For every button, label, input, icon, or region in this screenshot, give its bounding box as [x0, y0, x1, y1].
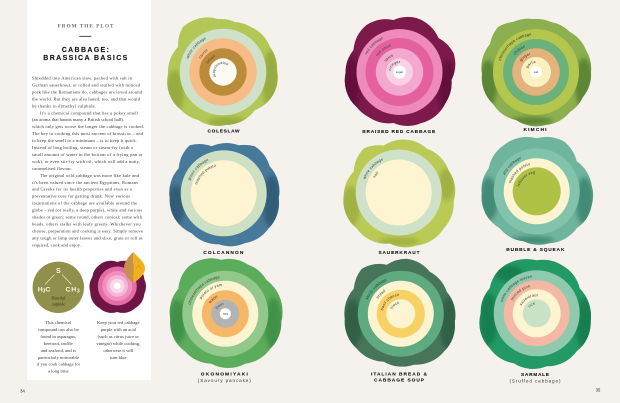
- body text: preventative cure for getting drunk. Now various: [32, 194, 130, 199]
- page number 34: 34: [20, 388, 25, 394]
- cabbage: sauerkraut: SAUERKRAUT: [378, 250, 420, 256]
- cabbage: colcannon: mashed potato: [195, 164, 216, 185]
- body text: caramelised flavour.: [32, 166, 72, 171]
- cabbage: coleslaw: white cabbage: [186, 38, 206, 58]
- caption: dimethyl sulphide: compound can also be: [38, 327, 79, 332]
- body text: small amount of water in the bottom of a frying pan or: [32, 152, 143, 157]
- cabbage: sauerkraut: salt: [373, 172, 378, 178]
- cabbage: kimchi: ginger: [520, 53, 530, 62]
- body text: shades of green; some round, others conical; some with: [32, 214, 143, 220]
- caption: dimethyl sulphide: found in asparagus,: [40, 334, 76, 340]
- cabbage: italian bread and cabbage soup: CABBAGE SOUP: [374, 378, 425, 384]
- cabbage: italian bread and cabbage soup: savoy cabbage: [366, 279, 386, 300]
- cabbage: kimchi: KIMCHI: [524, 127, 547, 133]
- chemical diagram: dimethyl sulphide: Dimethyl: [52, 296, 65, 300]
- body text: Instead of long boiling, steam or steam-fry (with a: [32, 145, 133, 151]
- body text: the world. But they are also hated, too, and that would: [32, 96, 141, 102]
- body text: incarnations of the cabbage are available around the: [32, 201, 137, 206]
- cabbage: braised red cabbage: vinegar: [388, 61, 400, 71]
- cabbage: coleslaw: carrot: [199, 49, 208, 58]
- cabbage: italian bread and cabbage soup: [344, 258, 456, 384]
- cabbage: kimchi: garlic: [526, 60, 536, 68]
- cabbage: bubble and squeak: any cabbage: [503, 157, 521, 175]
- cabbage: bubble and squeak: mashed potato: [509, 163, 530, 183]
- cabbage: braised red cabbage: red onion: [376, 44, 392, 56]
- kicker: from the plot: FROM THE PLOT: [58, 24, 114, 30]
- cabbage: sauerkraut: white cabbage: [363, 158, 383, 179]
- cabbage: coleslaw: [167, 17, 278, 134]
- caption: red cabbage tip: turn blue: [110, 355, 127, 360]
- caption: red cabbage tip: Keep your red cabbage: [97, 320, 140, 325]
- cabbage: sarmale: sauerkraut: [520, 294, 538, 306]
- chemical diagram: dimethyl sulphide: sulphide: [52, 302, 65, 306]
- cabbage: italian bread and cabbage soup: basil cheese: [380, 294, 399, 310]
- caption: red cabbage tip: purple with an acid: [101, 327, 137, 332]
- body text: (an aroma that haunts many a British school hall),: [32, 117, 124, 123]
- cabbage: colcannon: COLCANNON: [203, 250, 244, 256]
- cabbage: bubble and squeak: BUBBLE & SQUEAK: [506, 247, 565, 253]
- cabbage: okonomiyaki: flour: [215, 302, 224, 309]
- heading: [43, 47, 128, 62]
- cabbage: okonomiyaki: egg: [223, 312, 228, 316]
- cabbage: okonomiyaki: water: [208, 295, 218, 304]
- cabbage: bubble and squeak: leftover veg: [516, 171, 535, 186]
- cabbage: braised red cabbage: sugar: [396, 70, 403, 74]
- icon: red cabbage with lemon: [89, 252, 146, 313]
- chemical diagram: dimethyl sulphide: H: [38, 286, 43, 294]
- body text: German sauerkraut, or rolled and stuffed with minced: [32, 82, 141, 88]
- caption: dimethyl sulphide: This chemical: [45, 320, 72, 325]
- caption: dimethyl sulphide: if you cook cabbage for: [36, 362, 81, 367]
- caption: dimethyl sulphide: and seafood, and is: [41, 348, 76, 354]
- panel: from the plot article: [27, 0, 151, 380]
- body text: it's been valued since the ancient Egyptians, Romans: [32, 180, 138, 186]
- caption: dimethyl sulphide: [36, 320, 81, 374]
- body text: which only gets worse the longer the cabbage is cooked.: [32, 124, 144, 129]
- cabbage: italian bread and cabbage soup: ITALIAN BREAD &: [371, 372, 428, 378]
- caption: red cabbage tip: otherwise it will: [103, 348, 134, 353]
- chemical diagram: dimethyl sulphide: CH: [65, 286, 77, 294]
- body text: heads, others stalks with leafy greens. Whichever you: [32, 222, 141, 228]
- body text: required, cook and enjoy.: [32, 242, 81, 248]
- cabbage: sarmale: (Stuffed cabbage): [510, 378, 561, 384]
- cabbage: sarmale: SARMALE: [521, 372, 550, 378]
- cabbage: colcannon: [169, 143, 280, 256]
- chemical diagram: dimethyl sulphide: C: [45, 286, 50, 294]
- cabbage: braised red cabbage: spice: [384, 54, 393, 62]
- cabbage: coleslaw: mayonnaise: [212, 61, 228, 78]
- cabbage: braised red cabbage: red cabbage: [365, 37, 383, 54]
- cabbage: italian bread and cabbage soup: bread: [376, 289, 386, 299]
- heading: CABBAGE:: [62, 47, 109, 54]
- cabbage: italian bread and cabbage soup: stock: [390, 302, 400, 310]
- cabbage: braised red cabbage: BRAISED RED CABBAGE: [362, 129, 436, 135]
- cabbage: braised red cabbage: [344, 16, 456, 135]
- body text: any tough or limp outer leaves and slice, grate or roll as: [32, 235, 143, 241]
- body text: The key to cooking this most ancient of brassicas – and: [32, 131, 144, 136]
- chemical diagram: dimethyl sulphide: 3: [43, 288, 46, 294]
- body text: be thanks to dimethyl sulphide.: [32, 103, 96, 108]
- chemical diagram: dimethyl sulphide: 3: [77, 288, 81, 294]
- cabbage: sarmale: [479, 259, 592, 384]
- cabbage: coleslaw: onion: [206, 55, 216, 64]
- page number 35: 35: [596, 388, 601, 392]
- body text: and Greeks for its health properties and even as a: [32, 187, 132, 192]
- cabbage: okonomiyaki: [170, 258, 283, 383]
- cabbage: bubble and squeak: [482, 136, 594, 253]
- body text: It's a chemical compound that has a pokey smell: [40, 110, 139, 115]
- caption: red cabbage tip: vinegar) while cooking,: [96, 341, 140, 347]
- cabbage: kimchi: [481, 18, 592, 133]
- body text: wok), or even stir-fry with oil, which will add a nutty,: [32, 159, 140, 165]
- body text: to keep the smell to a minimum – is to keep it quick.: [32, 138, 137, 143]
- body text: choose, preparation and cooking is easy. Simply remove: [32, 228, 143, 234]
- cabbage: okonomiyaki: (Savoury pancake): [198, 378, 251, 383]
- cabbage: kimchi: salt: [534, 70, 538, 74]
- caption: dimethyl sulphide: a long time: [48, 369, 69, 374]
- cabbage: kimchi: chinese/napa cabbage: [499, 33, 532, 60]
- cabbage: okonomiyaki: potato or yam: [200, 284, 222, 300]
- chemical diagram: dimethyl sulphide: S: [56, 268, 61, 275]
- cabbage: okonomiyaki: chinese/napa cabbage: [188, 276, 220, 304]
- body text: The original wild cabbage was more like kale and: [40, 173, 140, 178]
- caption: red cabbage tip: (such as citrus juice or: [98, 334, 139, 339]
- caption: dimethyl sulphide: particularly noticeable: [38, 355, 79, 360]
- cabbage: kimchi: chillies: [514, 46, 525, 55]
- chemical diagram: dimethyl sulphide: [33, 262, 84, 313]
- cabbage: coleslaw: COLESLAW: [208, 128, 240, 134]
- caption: dimethyl sulphide: beetroot, truffle: [44, 341, 73, 347]
- body text: pork like the Romanians do, cabbages are loved around: [32, 89, 143, 95]
- cabbage: okonomiyaki: OKONOMIYAKI: [201, 372, 248, 378]
- cabbage: sarmale: rice: [528, 302, 535, 308]
- cabbage: sarmale: white cabbage leaves: [500, 276, 532, 302]
- cabbage: colcannon: green cabbage: [188, 159, 208, 180]
- body text: globe – red (or really, a deep purple), white and various: [32, 208, 142, 214]
- cabbage: sauerkraut: [343, 140, 456, 256]
- heading: BRASSICA BASICS: [43, 55, 128, 62]
- body text: [32, 76, 144, 248]
- caption: red cabbage tip: [96, 320, 140, 360]
- body text: Shredded into American slaw, packed with salt in: [32, 76, 133, 82]
- cabbage: sarmale: minced pork: [511, 284, 530, 300]
